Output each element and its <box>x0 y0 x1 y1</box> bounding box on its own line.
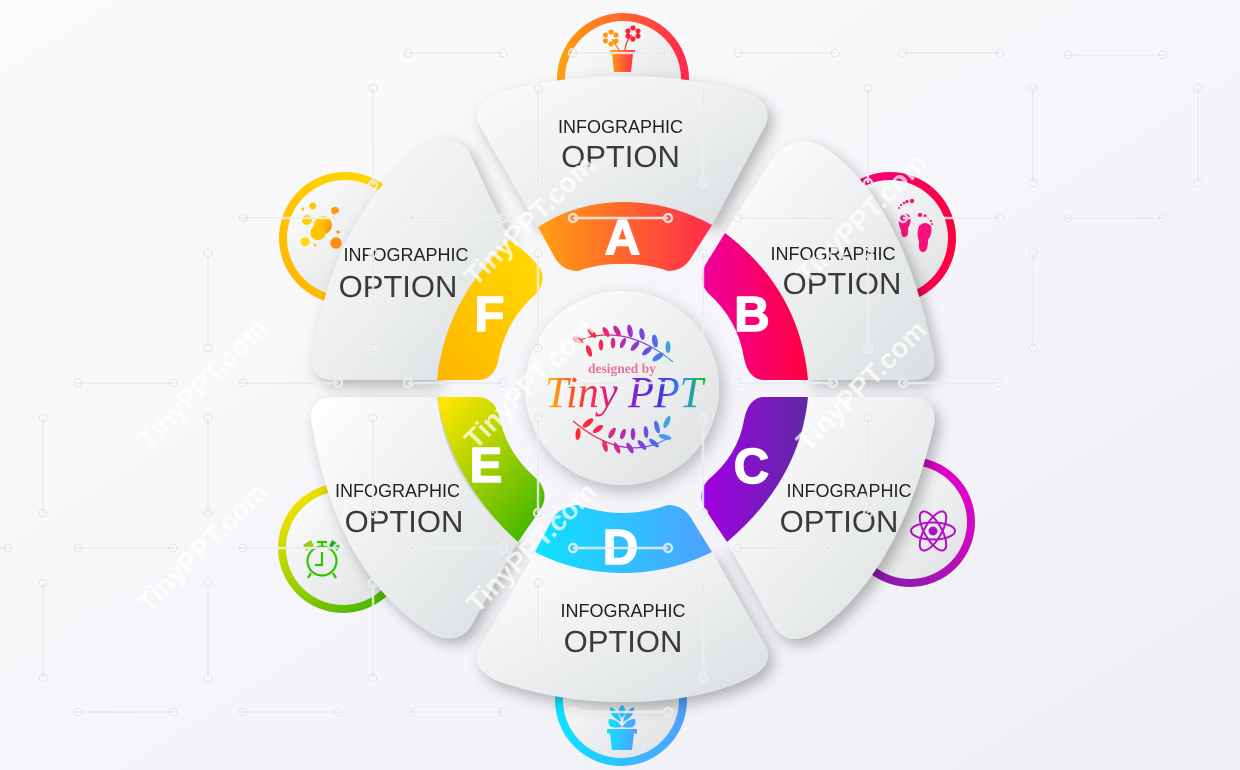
panel: card B <box>702 141 934 380</box>
text: option E <box>335 481 463 539</box>
text: option F: OPTION <box>339 269 457 304</box>
watermarks <box>131 147 933 619</box>
panel: card A <box>477 76 768 271</box>
tab A <box>538 202 712 271</box>
text: option D <box>560 601 686 659</box>
tab E <box>437 397 545 542</box>
icon: alarm clock <box>303 540 340 578</box>
center logo disc <box>525 291 719 485</box>
icon: footprints <box>898 199 933 252</box>
tab letters <box>470 211 770 575</box>
tab D <box>535 505 712 573</box>
icon: flower pot <box>603 25 641 72</box>
panel: card C <box>701 397 934 639</box>
watermarks: TinyPPT.com <box>131 312 274 455</box>
watermarks: TinyPPT.com <box>460 476 603 619</box>
text: option C: INFOGRAPHIC <box>786 481 912 501</box>
tab B <box>702 233 808 380</box>
panel: card F <box>312 138 543 380</box>
text: option B: OPTION <box>783 266 901 301</box>
text: option A <box>558 117 683 174</box>
tab letters: A <box>605 211 640 265</box>
text: option C: OPTION <box>780 504 898 539</box>
watermarks: TinyPPT.com <box>458 149 601 292</box>
icon ring: B footprints <box>828 176 952 300</box>
text: option C <box>780 481 912 539</box>
icon: atom <box>911 508 955 554</box>
logo: top wreath <box>572 324 673 363</box>
text: option B <box>770 244 901 301</box>
watermarks: TinyPPT.com <box>458 312 601 455</box>
text: option F: INFOGRAPHIC <box>343 245 469 265</box>
logo: bottom wreath <box>573 415 672 454</box>
tab letters: B <box>734 288 770 342</box>
logo: designed by: designed by <box>588 361 656 376</box>
tab letters: E <box>470 439 502 493</box>
text: option E: INFOGRAPHIC <box>335 481 460 501</box>
text: option F <box>339 245 469 304</box>
text: option D: OPTION <box>564 624 682 659</box>
icon ring: C atom <box>849 461 971 583</box>
tab F <box>437 240 543 380</box>
icon: bubbles <box>300 202 342 249</box>
icon ring: A flower pot <box>561 17 685 141</box>
watermarks: TinyPPT.com <box>790 147 933 290</box>
watermarks: TinyPPT.com <box>131 476 274 619</box>
text: option D: INFOGRAPHIC <box>560 601 686 621</box>
icon ring: D plant <box>559 638 683 762</box>
logo: Tiny PPT: Tiny PPT <box>545 368 706 417</box>
tab letters: D <box>603 521 638 575</box>
icon ring: E alarm clock <box>282 487 404 609</box>
tab letters: F <box>475 288 504 342</box>
text: option B: INFOGRAPHIC <box>770 244 896 264</box>
text: option E: OPTION <box>345 504 463 539</box>
icon: potted plant <box>607 705 637 750</box>
tab letters: C <box>734 440 769 494</box>
text: option A: INFOGRAPHIC <box>558 117 683 137</box>
text: option A: OPTION <box>561 139 680 174</box>
panel: card E <box>311 397 545 639</box>
tab C <box>701 397 808 542</box>
icon ring: F bubbles <box>283 176 407 300</box>
watermarks: TinyPPT.com <box>790 314 933 457</box>
panel: card D <box>477 505 768 702</box>
